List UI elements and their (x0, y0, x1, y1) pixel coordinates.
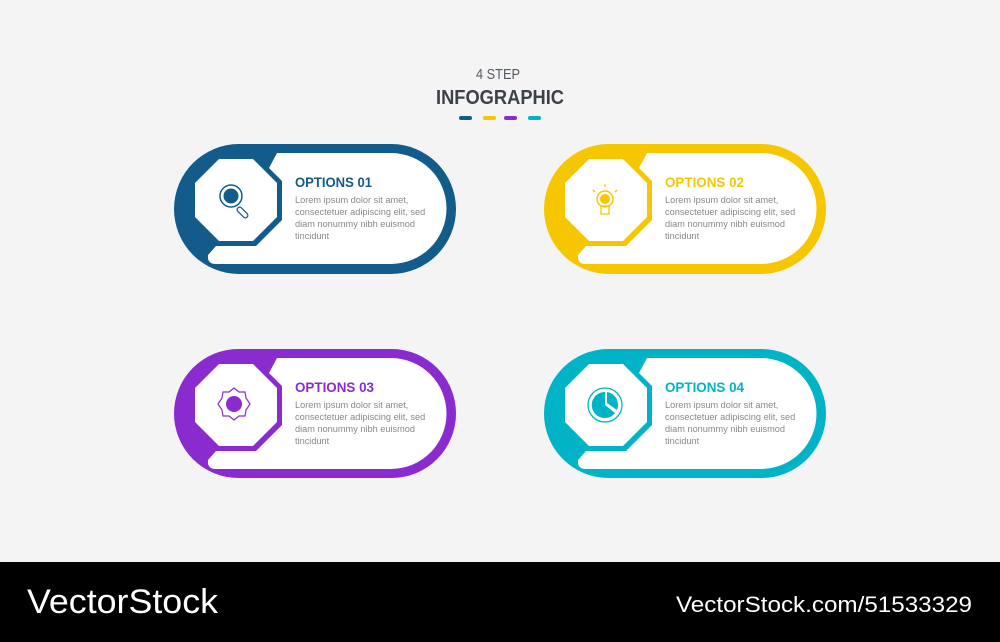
icon: magnifier (220, 185, 249, 219)
footer bar: VectorStock.com/51533329 (676, 592, 972, 617)
panel: options 02 (544, 144, 826, 274)
panel: options 01 (174, 144, 456, 274)
text: options 01 (295, 174, 425, 241)
panel: options 03 (174, 349, 456, 478)
title (436, 66, 564, 120)
text: options 02: Lorem ipsum dolor sit amet, (665, 195, 778, 205)
text: options 03: consectetuer adipiscing elit, sed (295, 412, 425, 422)
text: options 03 (295, 379, 425, 446)
text: options 03: tincidunt (295, 436, 330, 446)
text: options 01: consectetuer adipiscing elit, sed (295, 207, 425, 217)
icon: gear (218, 388, 250, 420)
title: 4 STEP (476, 66, 520, 83)
text: options 03: Lorem ipsum dolor sit amet, (295, 400, 408, 410)
title: INFOGRAPHIC (436, 87, 564, 109)
text: options 04: tincidunt (665, 436, 700, 446)
text: options 04: OPTIONS 04 (665, 379, 744, 395)
text: options 02: OPTIONS 02 (665, 174, 744, 190)
panel: options 04 (544, 349, 826, 478)
icon: light bulb (593, 184, 617, 214)
icon: pie chart (588, 388, 622, 422)
text: options 01: Lorem ipsum dolor sit amet, (295, 195, 408, 205)
text: options 02 (665, 174, 795, 241)
text: options 04: consectetuer adipiscing elit, sed (665, 412, 795, 422)
footer bar: VectorStock (27, 583, 219, 621)
footer bar (0, 562, 1000, 642)
text: options 04: diam nonummy nibh euismod (665, 424, 785, 434)
text: options 02: tincidunt (665, 231, 700, 241)
text: options 01: OPTIONS 01 (295, 174, 372, 190)
text: options 04 (665, 379, 795, 446)
text: options 01: diam nonummy nibh euismod (295, 219, 415, 229)
text: options 04: Lorem ipsum dolor sit amet, (665, 400, 778, 410)
text: options 01: tincidunt (295, 231, 330, 241)
text: options 03: diam nonummy nibh euismod (295, 424, 415, 434)
text: options 02: diam nonummy nibh euismod (665, 219, 785, 229)
text: options 03: OPTIONS 03 (295, 379, 374, 395)
text: options 02: consectetuer adipiscing elit, sed (665, 207, 795, 217)
